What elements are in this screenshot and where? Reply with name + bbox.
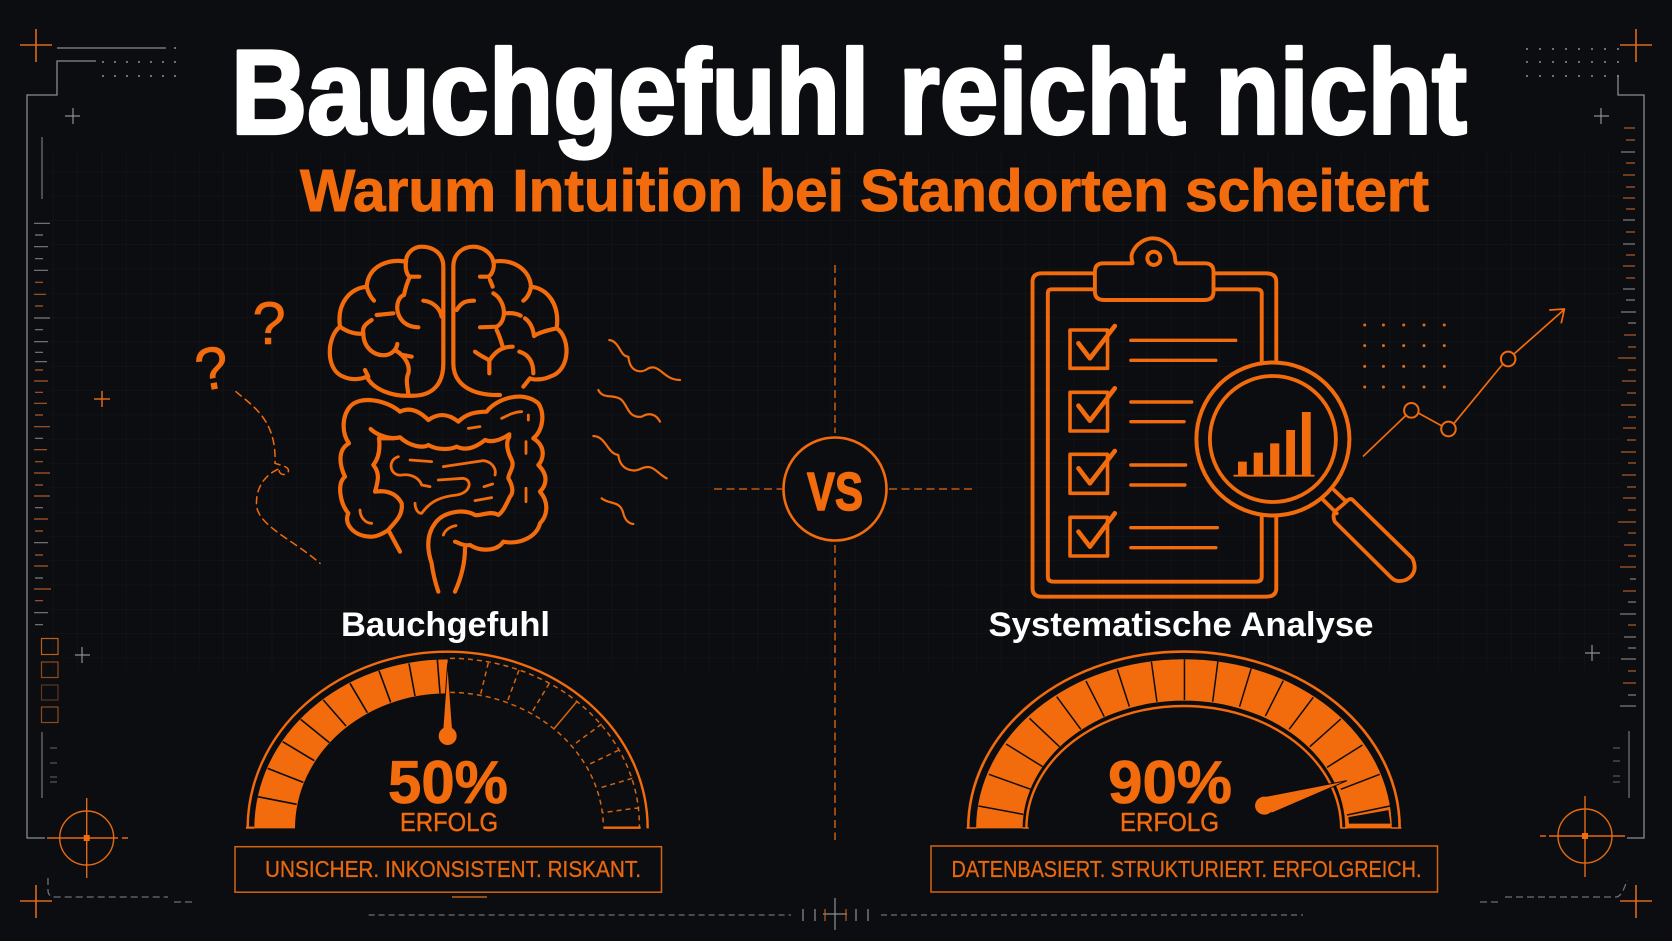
intestines	[340, 397, 546, 592]
frame outline right	[1618, 75, 1644, 838]
solid separator	[554, 701, 577, 728]
small crosses	[65, 108, 1609, 663]
left tagline box	[235, 847, 662, 897]
icon: magnifier	[1196, 362, 1415, 581]
bottom centre target	[803, 898, 868, 930]
reticle bottom left	[47, 798, 128, 878]
left ruler ticks grey	[34, 223, 50, 625]
segment separators	[979, 659, 1390, 815]
corner cross top left	[20, 29, 52, 62]
frame outline left	[27, 61, 96, 838]
right heading: Systematische Analyse	[988, 606, 1374, 644]
right ruler ticks orange	[1618, 128, 1636, 683]
gauge outer arc	[248, 652, 648, 828]
title: Bauchgefuhl reicht nicht	[231, 26, 1467, 160]
small orange cross	[94, 391, 110, 407]
bottom dashed rule right	[881, 914, 1303, 916]
brain	[330, 247, 567, 396]
erfolg label: ERFOLG	[400, 809, 498, 837]
base caps	[966, 827, 1401, 829]
checklist lines	[1131, 340, 1236, 548]
corner cross bottom right	[1620, 885, 1652, 918]
small intestine detail	[360, 412, 528, 535]
gauge inner arc	[1026, 706, 1341, 828]
empty last segment	[1348, 809, 1391, 824]
left tagline: UNSICHER. INKONSISTENT. RISKANT.	[265, 856, 641, 882]
small tab under box	[452, 896, 487, 898]
right ruler ticks grey	[1620, 152, 1636, 706]
gauge base right	[603, 826, 641, 829]
erfolg label: ERFOLG	[1120, 809, 1219, 837]
chart nodes	[1404, 352, 1515, 436]
right gauge	[966, 652, 1401, 837]
left ruler ticks orange	[34, 282, 51, 601]
side rules	[42, 137, 1629, 798]
right tagline: DATENBASIERT. STRUKTURIERT. ERFOLGREICH.	[952, 856, 1422, 882]
bottom dashed rule left	[369, 914, 791, 916]
needle	[1255, 781, 1347, 815]
magnifier handle	[1323, 490, 1415, 581]
corner cross bottom left	[20, 885, 52, 918]
gauge filled band	[976, 659, 1392, 828]
corner cross top right	[1620, 29, 1652, 62]
icon: clipboard	[1033, 238, 1276, 597]
wavy lines	[593, 340, 680, 524]
dashed empty segments	[450, 658, 639, 828]
gauge base left	[246, 827, 254, 829]
trend line	[1364, 309, 1564, 456]
top left rule	[57, 47, 166, 49]
dot grid top right	[1527, 49, 1619, 76]
question mark upper: ?	[252, 290, 286, 357]
bottom left bracket	[48, 878, 193, 902]
bottom right bracket	[1480, 880, 1627, 902]
needle	[439, 663, 457, 745]
question mark lower: ?	[190, 333, 234, 404]
gauge outer arc	[968, 652, 1400, 828]
segment separators	[258, 659, 440, 804]
check marks	[1078, 326, 1115, 547]
icon: brain and intestines	[236, 247, 680, 592]
90 percent value: 90%	[1108, 749, 1232, 816]
dashed wandering path	[236, 392, 320, 563]
gauge filled band	[254, 659, 448, 828]
left gauge	[246, 652, 648, 837]
left status squares	[42, 638, 58, 722]
small bottom ticks	[50, 748, 1620, 782]
rising line chart	[1364, 309, 1564, 456]
VS label: VS	[807, 462, 863, 522]
50 percent value: 50%	[388, 749, 508, 816]
reticle bottom right	[1540, 796, 1625, 877]
bars baseline	[1234, 475, 1314, 477]
board	[1033, 238, 1276, 597]
VS circle	[784, 438, 886, 540]
right tagline box	[931, 846, 1438, 892]
magnifier bars	[1238, 412, 1311, 475]
subtitle: Warum Intuition bei Standorten scheitert	[300, 158, 1429, 224]
dot grid	[1365, 325, 1444, 387]
dot grid top left	[103, 48, 176, 76]
dashed divider lines	[714, 265, 974, 840]
bottom centre orange ticks	[825, 909, 846, 921]
divider and VS badge	[714, 265, 974, 840]
checklist boxes	[1070, 330, 1108, 556]
left heading: Bauchgefuhl	[341, 606, 550, 644]
